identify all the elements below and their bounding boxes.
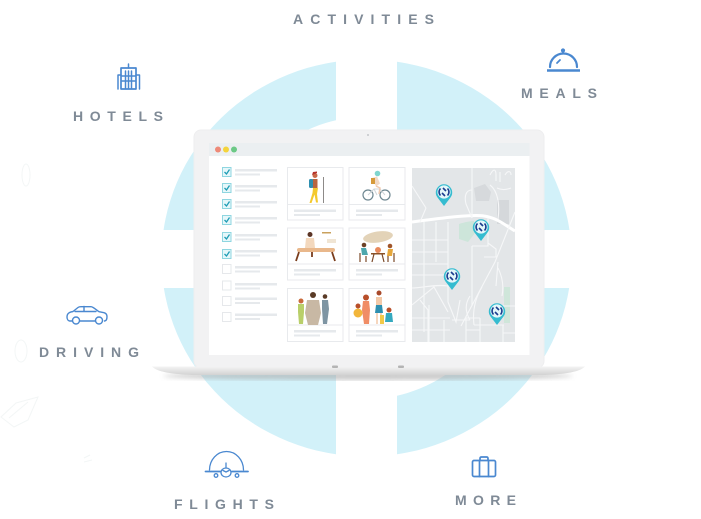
laptop base bbox=[152, 366, 585, 375]
icon: hotel building bbox=[118, 64, 140, 89]
map pin 1 bbox=[436, 184, 452, 206]
card: massage bbox=[288, 228, 343, 280]
map bbox=[412, 168, 515, 342]
icon: plane under arc bbox=[206, 452, 248, 477]
label: more: MORE bbox=[455, 492, 516, 508]
icon: meal cloche bbox=[547, 50, 580, 70]
browser title bar bbox=[209, 143, 530, 156]
label: activities: ACTIVITIES bbox=[293, 11, 434, 27]
map pin 2 bbox=[473, 219, 489, 241]
label: meals: MEALS bbox=[521, 85, 597, 101]
card: group of friends bbox=[288, 288, 343, 342]
laptop shadow bbox=[163, 372, 573, 380]
icon: suitcase bbox=[472, 457, 496, 476]
quadrant: top right bbox=[397, 62, 570, 230]
screen bbox=[209, 143, 530, 355]
map pin 3 bbox=[444, 268, 460, 290]
checklist bbox=[222, 168, 277, 322]
card: family bbox=[349, 288, 405, 342]
laptop bbox=[152, 130, 585, 380]
label: hotels: HOTELS bbox=[73, 108, 163, 124]
icon: car bbox=[67, 306, 107, 324]
label: flights: FLIGHTS bbox=[174, 496, 274, 512]
map pin 4 bbox=[489, 303, 505, 325]
quadrant: bottom right bbox=[397, 288, 570, 454]
label: driving: DRIVING bbox=[39, 344, 139, 360]
card: cafe bbox=[349, 228, 405, 280]
background circle quadrants bbox=[162, 59, 572, 456]
laptop lid bbox=[194, 130, 544, 368]
card: cyclist bbox=[349, 168, 405, 220]
quadrant: bottom left bbox=[164, 288, 336, 454]
quadrant: top left bbox=[164, 62, 336, 230]
card: hiker bbox=[288, 168, 343, 220]
